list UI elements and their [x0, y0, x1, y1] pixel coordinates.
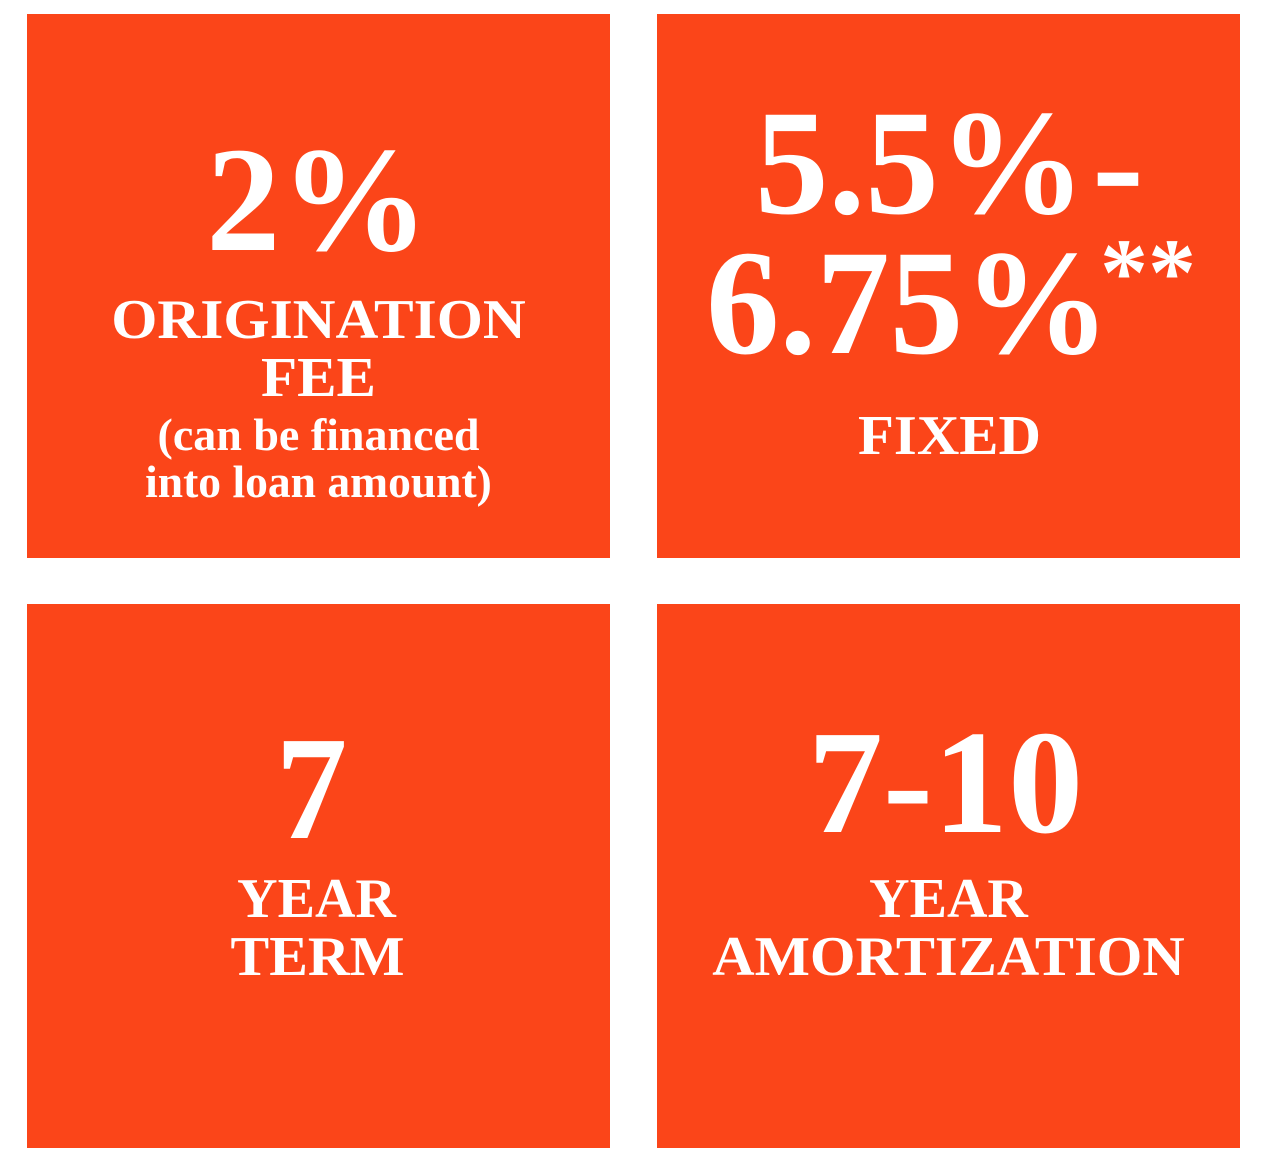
panel: year amortization	[657, 604, 1240, 1148]
figure: 7: 7	[276, 707, 347, 871]
figure: 7-10: 7-10	[808, 701, 1083, 865]
figure: 5.5%: 5.5%	[755, 80, 1086, 246]
panel: origination fee	[27, 14, 610, 558]
note: can be financed: (can be financed	[158, 409, 480, 460]
figure: 2%: 2%	[206, 117, 429, 283]
figure: 6.75%: 6.75%	[706, 220, 1110, 386]
label: origination: ORIGINATION	[111, 289, 526, 351]
label: term: TERM	[231, 926, 404, 988]
label: fixed: FIXED	[858, 405, 1041, 467]
label: amortization: AMORTIZATION	[712, 926, 1185, 988]
label: year: YEAR	[869, 868, 1028, 930]
panel: year term	[27, 604, 610, 1148]
panel: fixed rate	[657, 14, 1240, 558]
note: into loan amount: into loan amount)	[145, 456, 492, 507]
label: year: YEAR	[237, 868, 396, 930]
footnote marker: asterisks: **	[1100, 219, 1196, 326]
label: fee: FEE	[261, 347, 376, 409]
figure: dash: -	[1092, 77, 1144, 250]
